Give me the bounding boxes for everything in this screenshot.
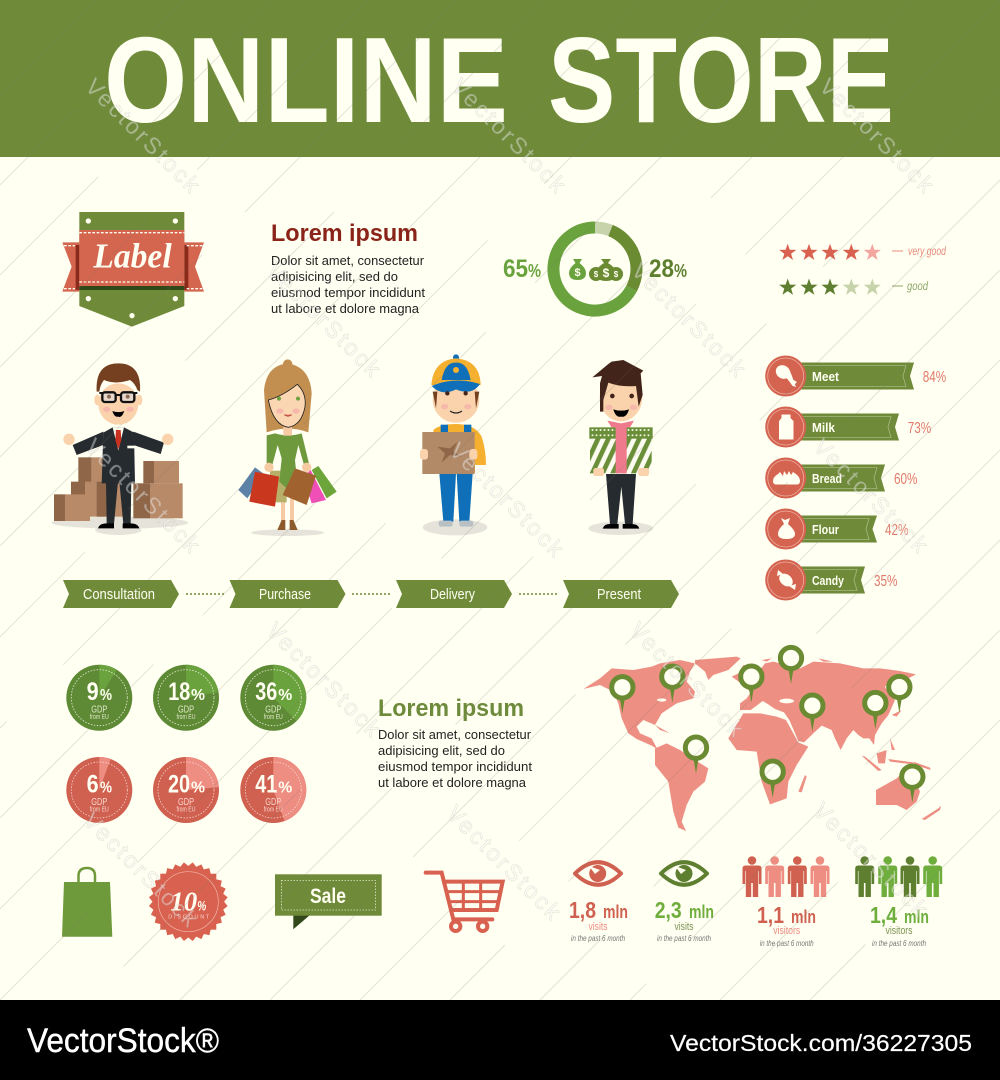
stat: 2,3 mln visits: 2,3 bbox=[655, 897, 682, 923]
stat: 1,4 mln visitors: mln bbox=[904, 907, 929, 927]
watermark text: VectorStock bbox=[261, 617, 386, 742]
text block: lower lorem ipsum: Lorem ipsum bbox=[378, 695, 524, 722]
icon: red people bbox=[742, 856, 830, 897]
gdp circle: 6%: from EU bbox=[90, 806, 109, 814]
icon: shopping cart bbox=[426, 873, 503, 931]
process step: Present bbox=[563, 580, 679, 608]
gdp circle: 9%: % bbox=[100, 687, 112, 704]
stat: 1,1 mln visitors: 1,1 bbox=[757, 902, 784, 928]
gdp circle: 9%: 9 bbox=[87, 678, 99, 706]
stat: 1,8 mln visits: in the past 6 month bbox=[571, 934, 625, 943]
watermark text: VectorStock bbox=[444, 437, 569, 562]
text block: lower lorem ipsum: ut labore et dolore magna bbox=[378, 776, 526, 790]
stat: 2,3 mln visits: visits bbox=[674, 921, 694, 933]
food bar: Candy: Candy bbox=[812, 573, 845, 588]
stat: 1,4 mln visitors: 1,4 bbox=[870, 902, 897, 928]
gdp circle: 6% bbox=[66, 757, 132, 823]
food bar: Bread bbox=[765, 458, 918, 498]
figure: woman with shopping bags bbox=[238, 359, 337, 536]
food bar: Milk: Milk bbox=[812, 420, 836, 435]
star rating: very good: very good bbox=[908, 244, 946, 258]
icon: money bags: $ bbox=[614, 270, 619, 279]
food bar: Flour: 42% bbox=[885, 522, 908, 539]
figure: man with gift box bbox=[588, 360, 653, 535]
process step: Delivery bbox=[396, 580, 512, 608]
text block: lower lorem ipsum: adipisicing elit, sed do bbox=[378, 744, 505, 758]
watermark text: VectorStock bbox=[808, 797, 933, 922]
gdp circle: 9%: from EU bbox=[90, 714, 109, 721]
text block: top lorem ipsum: Dolor sit amet, consectetur bbox=[271, 254, 424, 268]
stat: 1,4 mln visitors: visitors bbox=[886, 925, 913, 937]
food bar: Candy: 35% bbox=[874, 573, 898, 590]
gdp circle: 20%: % bbox=[191, 779, 205, 796]
stat: 1,1 mln visitors: visitors bbox=[773, 925, 801, 937]
text block: top lorem ipsum bbox=[271, 220, 426, 316]
food bar: Milk: 73% bbox=[908, 420, 931, 437]
process step: Purchase: Purchase bbox=[259, 586, 311, 603]
watermark text: VectorStock bbox=[624, 617, 749, 742]
stat: 1,8 mln visits: mln bbox=[603, 902, 628, 922]
process step: Consultation: Consultation bbox=[83, 586, 155, 603]
text block: top lorem ipsum: ut labore et dolore magna bbox=[271, 302, 419, 316]
gdp circle: 36%: % bbox=[278, 687, 292, 704]
text block: lower lorem ipsum: Dolor sit amet, consectetur bbox=[378, 728, 531, 742]
text block: lower lorem ipsum bbox=[378, 695, 533, 790]
gdp circle: 20%: 20 bbox=[168, 770, 190, 798]
food bar: Flour: Flour bbox=[812, 522, 839, 537]
sale tag bbox=[275, 874, 382, 929]
watermark text: VectorStock bbox=[80, 433, 205, 558]
gdp circle: 41%: 41 bbox=[255, 770, 277, 798]
stat: 1,4 mln visitors: in the past 6 month bbox=[872, 939, 926, 948]
process step: Consultation bbox=[63, 580, 179, 608]
process step: Present: Present bbox=[597, 586, 642, 603]
star rating: very good bbox=[779, 244, 946, 260]
star rating: good bbox=[779, 278, 928, 295]
header banner bbox=[0, 0, 1000, 157]
gdp circle: 20%: GDP bbox=[178, 797, 194, 808]
watermark text: VectorStock bbox=[446, 73, 571, 198]
title: ONLINE bbox=[104, 12, 508, 148]
discount badge bbox=[149, 862, 228, 941]
process step: Delivery: Delivery bbox=[430, 586, 475, 603]
food bar: Meet: 84% bbox=[923, 369, 946, 386]
food bar: Milk bbox=[765, 406, 931, 448]
gdp circle: 41%: from EU bbox=[264, 806, 283, 814]
gdp circle: 41%: GDP bbox=[265, 797, 282, 808]
watermark text: VectorStock bbox=[814, 73, 939, 198]
gdp circle: 6%: % bbox=[100, 779, 112, 796]
gdp circle: 9%: GDP bbox=[91, 705, 108, 716]
icon: green people bbox=[855, 856, 942, 897]
icon: money bags: $ bbox=[594, 270, 599, 279]
icon: flour sack bbox=[778, 518, 795, 539]
gdp circle: 41% bbox=[240, 757, 306, 823]
stat: 2,3 mln visits bbox=[655, 862, 714, 943]
watermark text: VectorStock bbox=[80, 73, 205, 198]
watermark text bbox=[78, 73, 939, 932]
icon: shopping bag bbox=[62, 868, 112, 937]
donut percent right: % bbox=[674, 261, 687, 281]
figure: consultant with boxes bbox=[52, 363, 188, 535]
icon: candy bbox=[777, 570, 796, 590]
gdp circle: 36%: from EU bbox=[264, 714, 283, 721]
stat: 1,4 mln visitors bbox=[855, 856, 942, 948]
label badge: Label bbox=[92, 238, 172, 276]
text block: top lorem ipsum: eiusmod tempor incididunt bbox=[271, 286, 426, 300]
gdp circle: 20%: from EU bbox=[176, 806, 196, 814]
food bar: Bread: Bread bbox=[812, 471, 842, 486]
gdp circle: 18%: % bbox=[191, 687, 205, 704]
gdp circle: 36%: GDP bbox=[265, 705, 282, 716]
gdp circle: 18%: from EU bbox=[176, 714, 196, 721]
icon: bread bbox=[773, 471, 800, 484]
icon: money bags bbox=[569, 259, 623, 281]
title: STORE bbox=[548, 12, 894, 148]
world map with pins bbox=[583, 647, 941, 831]
discount badge: % bbox=[197, 898, 207, 914]
gdp circle: 41%: % bbox=[278, 779, 292, 796]
food bar: Flour bbox=[765, 508, 908, 550]
gdp circle: 18%: GDP bbox=[178, 705, 194, 716]
gdp circle: 20% bbox=[153, 757, 219, 823]
stat: 1,1 mln visitors: in the past 6 month bbox=[760, 939, 814, 948]
process step: Purchase bbox=[230, 580, 346, 608]
icon: money bags: $ bbox=[574, 267, 581, 279]
gdp circle: 36% bbox=[240, 665, 306, 731]
stat: 1,8 mln visits: 1,8 bbox=[569, 897, 596, 923]
watermark text: VectorStock bbox=[78, 807, 203, 932]
donut chart bbox=[553, 227, 636, 310]
footer bar: VectorStock® bbox=[27, 1022, 219, 1060]
stat: 1,1 mln visitors: mln bbox=[791, 907, 816, 927]
sale tag: Sale bbox=[310, 885, 346, 908]
watermark text: VectorStock bbox=[808, 433, 933, 558]
text block: top lorem ipsum: Lorem ipsum bbox=[271, 220, 418, 247]
watermark text: VectorStock bbox=[261, 257, 386, 382]
donut percent left: 65 bbox=[503, 255, 528, 283]
discount badge: DISCOUNT bbox=[168, 915, 210, 921]
stat: 1,1 mln visitors bbox=[742, 856, 830, 948]
stat: 2,3 mln visits: mln bbox=[689, 902, 714, 922]
stat: 1,8 mln visits bbox=[569, 862, 628, 943]
stat: 1,8 mln visits: visits bbox=[588, 921, 608, 933]
label badge bbox=[62, 212, 204, 327]
watermark text: VectorStock bbox=[626, 257, 751, 382]
food bar: Meet bbox=[765, 356, 946, 396]
star rating: good: good bbox=[907, 279, 928, 293]
gdp circle: 6%: 6 bbox=[87, 770, 99, 798]
figure: delivery man with parcel bbox=[420, 354, 487, 535]
footer bar: VectorStock.com/36227305 bbox=[670, 1030, 972, 1056]
discount badge: 10 bbox=[170, 887, 198, 917]
gdp circle: 6%: GDP bbox=[91, 797, 108, 808]
food bar: Meet: Meet bbox=[812, 369, 840, 384]
icon: green eye bbox=[661, 862, 707, 885]
icon: meat bbox=[773, 362, 797, 387]
gdp circle: 18%: 18 bbox=[168, 678, 190, 706]
gdp circle: 36%: 36 bbox=[255, 678, 277, 706]
gdp circle: 18% bbox=[153, 665, 219, 731]
text block: top lorem ipsum: adipisicing elit, sed do bbox=[271, 270, 398, 284]
stat: 2,3 mln visits: in the past 6 month bbox=[657, 934, 711, 943]
icon: money bags: $ bbox=[603, 266, 610, 280]
gdp circle: 9% bbox=[66, 665, 132, 731]
icon: red eye bbox=[575, 862, 621, 885]
icon: milk carton bbox=[779, 414, 794, 440]
food bar: Bread: 60% bbox=[894, 471, 918, 488]
watermark text: VectorStock bbox=[441, 800, 566, 925]
text block: lower lorem ipsum: eiusmod tempor incididunt bbox=[378, 760, 533, 774]
donut percent right: 28 bbox=[649, 255, 674, 283]
food bar: Candy bbox=[765, 560, 898, 600]
footer bar bbox=[0, 1000, 1000, 1080]
donut percent left: % bbox=[528, 261, 541, 281]
